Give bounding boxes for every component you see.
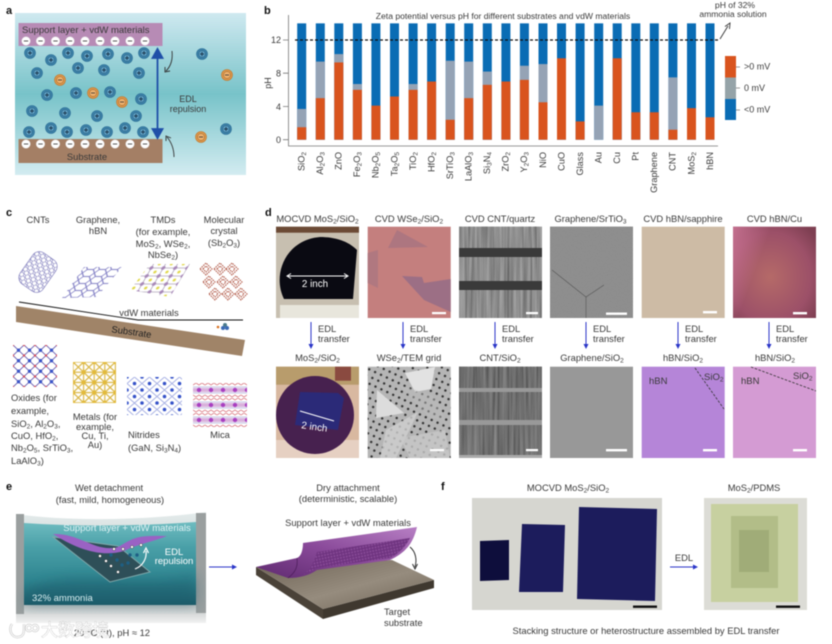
x axis category labels (296, 152, 715, 193)
arrow: EDL transfer: EDL (685, 323, 703, 334)
x axis category labels: TiO (408, 156, 418, 170)
oxides label: LaAlO (11, 455, 37, 466)
metals label (73, 411, 117, 450)
x axis category labels: N (482, 156, 492, 162)
heading TMDs: (for example, (136, 226, 190, 237)
arrow: EDL transfer (492, 322, 534, 349)
EDL repulsion text: repulsion (170, 104, 206, 114)
oxides label: 2 (23, 448, 27, 454)
x axis category labels: MoS (686, 156, 696, 175)
nitrides label: ) (178, 442, 181, 453)
photo: hBN on Cu (733, 227, 816, 318)
photo: MoS2 on PDMS (704, 498, 807, 610)
wedge substrate (16, 306, 245, 356)
arrow: EDL transfer: EDL (502, 323, 520, 334)
icon: carbon nanotube (16, 248, 60, 296)
ions between layers (98, 544, 142, 574)
arrow: EDL transfer: transfer (776, 333, 808, 344)
panel b label: b (264, 5, 271, 17)
arrow: EDL transfer: EDL (318, 323, 336, 334)
heading MOCVD: /SiO (587, 482, 606, 493)
bar NiO (538, 23, 548, 140)
heading molecular crystal: 2 (222, 242, 226, 250)
heading TMDs: MoS (136, 238, 155, 249)
heading MOCVD: 2 (606, 488, 610, 494)
bar hBN (706, 23, 714, 140)
label target substrate: Target (384, 606, 410, 617)
panel c: vdW materials and substrates (6, 207, 247, 468)
ammonia tank (16, 512, 206, 623)
heading TMDs: 2 (184, 244, 188, 250)
heading dry attachment: (deterministic, scalable) (299, 493, 397, 504)
arrow: EDL transfer (400, 322, 442, 349)
x axis category labels: ZrO (500, 156, 510, 171)
oxides label: Nb (11, 442, 23, 453)
heading molecular crystal: Molecular (204, 214, 244, 225)
solution background (15, 13, 246, 175)
heading wet detachment (56, 482, 164, 505)
x axis category labels: 3 (356, 152, 364, 156)
x axis category labels: 2 (691, 152, 698, 156)
bar Y2O3 (520, 23, 529, 140)
y axis ticks (271, 35, 281, 145)
arrow: curved top (165, 51, 172, 72)
oxides label: O (47, 418, 54, 429)
purple film peeling (256, 527, 417, 578)
x axis category labels: SrTiO (445, 156, 455, 179)
heading: /SiO (318, 352, 336, 363)
x axis category labels: 2 (375, 162, 382, 166)
photo: hBN on SiO2: SiO (793, 371, 809, 382)
oxides label: , (56, 430, 58, 441)
photo: hBN on SiO2 (733, 367, 816, 458)
x axis category labels: 2 (301, 152, 308, 156)
heading: 2 (314, 358, 318, 364)
label EDL repulsion (155, 547, 193, 567)
x axis category labels: Y (519, 166, 529, 173)
heading: 2 (418, 218, 422, 226)
x axis category labels: NiO (538, 152, 548, 168)
bar CuO (557, 23, 566, 140)
x axis category labels: 2 (412, 152, 420, 156)
substrate: Substrate (67, 151, 107, 162)
arrow: attachment curved (410, 547, 418, 569)
panel f: wafer-scale stacking (441, 481, 807, 636)
heading molecular crystal: O (226, 237, 233, 248)
negative surface charges (22, 37, 149, 148)
EDL repulsion text (170, 94, 206, 114)
x axis category labels: 3 (450, 152, 456, 156)
heading: CVD CNT/quartz (465, 213, 535, 224)
metals label: Au) (88, 439, 102, 450)
bar SrTiO3 (446, 23, 455, 140)
photo: MOCVD wafer: 2 inch (302, 279, 328, 290)
icon: mica lattice (193, 383, 247, 427)
x axis category labels: LaAlO (464, 156, 474, 181)
photo: CNT arrays on SiO2 (459, 367, 542, 458)
watermark (10, 621, 109, 640)
heading PDMS: /PDMS (751, 482, 780, 493)
photo: hBN on sapphire (642, 227, 725, 318)
arrow: EDL transfer: transfer (685, 333, 717, 344)
x axis category labels: 2 (394, 162, 401, 166)
oxides label: O (27, 442, 34, 453)
x axis category labels: 3 (524, 152, 530, 156)
nitrides label: 4 (174, 448, 178, 454)
x axis category labels: SiO (296, 156, 306, 171)
EDL repulsion text: EDL (179, 94, 197, 104)
y axis title: pH (263, 77, 273, 89)
heading molecular crystal: ) (237, 237, 240, 248)
oxides label: Oxides (for (11, 392, 57, 403)
arrow: EDL: EDL (675, 552, 693, 563)
panel d label: d (265, 207, 272, 219)
x axis category labels: O (370, 156, 380, 163)
legend (725, 56, 770, 120)
x axis category labels: HfO (426, 156, 436, 172)
x axis category labels: ZnO (334, 152, 344, 170)
icon: nitride lattice (127, 377, 182, 415)
heading wet detachment: (fast, mild, homogeneous) (56, 494, 164, 505)
heading: Graphene/SrTiO (554, 213, 623, 224)
column 6: hBN on Cu (733, 213, 816, 458)
heading TMDs: NbSe (148, 249, 171, 260)
heading: CVD hBN/sapphire (643, 213, 723, 224)
bar Au (594, 23, 603, 140)
x axis category labels: Nb (370, 166, 380, 178)
photo: graphene on SiO2 (550, 367, 633, 458)
photo: hBN on SiO2: 2 (809, 376, 813, 382)
heading MOCVD: MOCVD MoS (527, 482, 584, 493)
arrow: EDL transfer: EDL (593, 323, 611, 334)
column 3: CNT (459, 213, 542, 458)
oxides label: 3 (37, 460, 41, 468)
x axis category labels: 2 (505, 152, 512, 156)
heading TMDs: 2 (155, 244, 159, 250)
x axis category labels: Fe (352, 166, 362, 177)
y axis ticks: 12 (271, 35, 281, 45)
substrate (18, 139, 162, 163)
arrow: EDL transfer: transfer (593, 333, 625, 344)
heading: 2 (336, 358, 340, 364)
bar Fe2O3 (353, 23, 362, 140)
icon: molecular crystal (200, 263, 247, 300)
heading: 2 (355, 218, 359, 226)
oxides label: , Al (30, 418, 43, 429)
bar ZrO2 (501, 23, 510, 140)
x axis category labels: Ta (390, 166, 400, 176)
heading: 2 (699, 358, 703, 364)
x axis category labels: hBN (705, 152, 715, 170)
nitrides label (128, 429, 181, 454)
heading: MOCVD MoS (276, 213, 333, 224)
panel a label: a (6, 5, 13, 17)
heading: 3 (623, 218, 627, 226)
x axis category labels: 3 (468, 152, 475, 156)
column 2: WSe2 (368, 213, 451, 458)
oxides label: 2 (27, 424, 31, 430)
positive ions (24, 48, 231, 137)
oxides label: , (58, 418, 60, 429)
x axis category labels: O (519, 156, 529, 163)
vdW materials line (19, 302, 243, 320)
heading: CVD hBN/Cu (747, 213, 802, 224)
heading: Graphene/SiO (560, 352, 620, 363)
heading TMDs: ) (175, 249, 178, 260)
label support layer: Support layer + vdW materials (63, 523, 191, 534)
nitrides label: Nitrides (128, 429, 160, 440)
callout: pH of 32% ammonia solution: pH of 32% (715, 0, 755, 10)
heading dry attachment (299, 482, 397, 504)
panel f label: f (441, 481, 445, 493)
oxides label: SiO (11, 418, 27, 429)
x axis category labels: O (352, 156, 362, 163)
label conditions: 20 °C (rt), pH ≈ 12 (74, 627, 150, 638)
x axis category labels: O (315, 156, 325, 163)
legend: <0 mV (744, 104, 770, 114)
label support layer dry: Support layer + vdW materials (285, 517, 411, 528)
panel a: EDL repulsion schematic (6, 5, 246, 175)
nitrides label: (GaN, Si (128, 442, 164, 453)
oxides label: , SrTiO (38, 442, 67, 453)
arrow: EDL transfer: transfer (502, 333, 534, 344)
nitrides label: 3 (164, 448, 168, 454)
x axis category labels: CNT (668, 152, 678, 171)
x axis category labels: Glass (575, 152, 585, 176)
heading TMDs: , (188, 238, 190, 249)
x axis category labels: O (390, 156, 400, 163)
oxides label (11, 392, 73, 468)
arrow: EDL transfer (584, 322, 625, 349)
bar SiO2 (297, 23, 306, 140)
label 32% ammonia: 32% ammonia (32, 593, 93, 604)
x axis category labels: Cu (612, 152, 622, 164)
heading: MoS (295, 352, 314, 363)
heading: hBN/SiO (663, 352, 699, 363)
heading graphene: Graphene, (76, 214, 120, 225)
column 4: graphene (550, 213, 633, 458)
nitrides label: N (168, 442, 174, 453)
x axis category labels: Pt (630, 152, 640, 161)
x axis category labels: 2 (524, 162, 530, 166)
mica label: Mica (210, 429, 231, 440)
heading graphene: hBN (89, 225, 107, 236)
legend: >0 mV (744, 62, 770, 72)
legend: 0 mV (744, 83, 765, 93)
label target substrate (384, 606, 423, 628)
oxides label: example, (11, 405, 49, 416)
bar Nb2O5 (371, 23, 380, 140)
oxides label: 3 (67, 448, 71, 454)
heading MOCVD: 2 (584, 488, 588, 494)
panel e: wet detachment and dry attachment (6, 481, 434, 640)
icon: graphene lattice (62, 267, 122, 298)
axes (283, 15, 718, 146)
heading molecular crystal: (Sb (208, 237, 222, 248)
arrow: EDL transfer: transfer (318, 333, 350, 344)
icon: small molecules (217, 323, 229, 330)
column 5: hBN on sapphire (642, 213, 725, 458)
y axis ticks: 8 (276, 68, 281, 78)
caption: Stacking structure or heterostructure assembled by EDL transfer (513, 625, 779, 636)
photo: TEM grid (368, 367, 451, 458)
dashed line at pH 12 (295, 39, 719, 41)
bar Si3N4 (483, 23, 492, 140)
arrow: EDL transfer (308, 322, 350, 349)
column 1: MoS2 (276, 213, 359, 458)
heading: CNT/SiO (479, 352, 517, 363)
photo: graphene on SrTiO3 (550, 227, 633, 318)
x axis category labels: Al (315, 166, 325, 175)
heading CNTs: CNTs (27, 214, 50, 225)
photo: hBN on SiO2: 2 (720, 376, 724, 384)
metals label: Metals (for (73, 411, 117, 422)
photo: WSe2 triangles (368, 227, 451, 318)
heading molecular crystal: crystal (210, 225, 238, 236)
heading: /SiO (337, 213, 355, 224)
bar Al2O3 (316, 23, 325, 140)
heading TMDs (136, 214, 190, 262)
vdW materials line: vdW materials (119, 307, 179, 318)
callout: pH of 32% ammonia solution (699, 0, 767, 39)
arrow: curved bottom (166, 136, 174, 157)
heading TMDs: , WSe (159, 238, 184, 249)
heading: CVD WSe (375, 213, 418, 224)
heading: 2 (439, 218, 443, 226)
heading: /TEM grid (401, 352, 441, 363)
heading PDMS: MoS (728, 482, 747, 493)
x axis category labels: Au (594, 152, 604, 163)
oxides label: , (70, 442, 73, 453)
photo: transferred wafer in hand (276, 367, 359, 458)
x axis category labels: 3 (486, 162, 494, 166)
support layer: Support layer + vdW materials (22, 25, 150, 36)
photo: CNT arrays on quartz (459, 227, 542, 318)
heading TMDs: 2 (171, 254, 175, 262)
photo: transferred wafer in hand: 2 inch (301, 420, 328, 435)
arrow: EDL transfer: EDL (410, 323, 428, 334)
heading: 2 (517, 358, 521, 364)
heading: WSe (377, 352, 397, 363)
photo: three MoS2 wafers (472, 498, 662, 610)
heading: 2 (620, 358, 624, 364)
heading: 2 (333, 218, 337, 226)
dark substrate slab (53, 537, 150, 582)
bar MoS2 (687, 23, 696, 140)
photo: MOCVD wafer (276, 227, 359, 318)
label EDL repulsion: repulsion (155, 556, 193, 567)
bar TiO2 (409, 23, 418, 140)
heading: /SiO (421, 213, 439, 224)
oxides label: CuO, HfO (11, 430, 52, 441)
arrow: EDL transfer: EDL (776, 323, 794, 334)
bar Glass (576, 23, 585, 140)
heading: 2 (791, 358, 795, 364)
y axis ticks: 0 (276, 135, 281, 145)
heading PDMS: 2 (747, 488, 751, 494)
wedge substrate: Substrate (111, 323, 152, 340)
oxides label: ) (41, 455, 44, 466)
bar Cu (613, 23, 622, 140)
label target substrate: substrate (384, 617, 423, 628)
arrow: wet to dry (209, 564, 237, 570)
label EDL repulsion: EDL (165, 547, 183, 558)
arrow: white curved EDL repulsion (135, 548, 148, 569)
icon: metal lattice (73, 362, 116, 403)
x axis category labels: 5 (394, 152, 401, 156)
x axis category labels: Graphene (649, 152, 659, 193)
y axis ticks: 4 (276, 102, 281, 112)
heading: 2 (397, 358, 401, 364)
bar ZnO (334, 23, 343, 140)
x axis category labels: CuO (556, 152, 566, 171)
watermark: 大数跨境 (41, 621, 109, 640)
x axis category labels: 2 (431, 152, 438, 156)
x axis category labels: 5 (375, 152, 382, 156)
bar Ta2O5 (390, 23, 399, 140)
photo: hBN on SiO2: hBN (741, 376, 760, 387)
heading molecular crystal: 3 (233, 242, 237, 250)
bars (297, 23, 714, 140)
heading dry attachment: Dry attachment (316, 482, 380, 493)
metals label: example, (76, 421, 114, 432)
x axis category labels: 3 (320, 152, 326, 156)
x axis category labels: 2 (356, 162, 364, 166)
target substrate block (256, 560, 434, 619)
bar LaAlO3 (464, 23, 473, 140)
water (24, 522, 196, 605)
arrow: EDL (670, 552, 698, 570)
arrow: EDL transfer (766, 322, 808, 349)
support layer (18, 23, 162, 46)
photo: hBN on SiO2: SiO (704, 372, 720, 383)
bar CNT (668, 23, 677, 140)
x axis category labels: 2 (320, 162, 326, 166)
heading graphene (76, 214, 120, 236)
heading molecular crystal (204, 214, 244, 250)
negative ions (55, 70, 232, 142)
panel c label: c (6, 207, 12, 219)
panel b: zeta potential chart (263, 0, 770, 193)
photo: hBN on SiO2: hBN (649, 376, 668, 387)
icon: TMD lattice (130, 264, 190, 297)
x axis category labels: 4 (486, 152, 494, 156)
panel e label: e (6, 481, 12, 493)
bar Pt (631, 23, 640, 140)
oxides label: 5 (34, 448, 38, 454)
chart title: Zeta potential versus pH for different substrates and vdW materials (376, 11, 630, 21)
oxides label: 3 (54, 424, 58, 430)
arrow: EDL double-headed (152, 49, 162, 138)
oxides label: 2 (43, 424, 47, 430)
arrow: EDL transfer: transfer (410, 333, 442, 344)
oxides label: 2 (52, 436, 56, 442)
arrow: EDL transfer (676, 322, 717, 349)
x axis category labels: Si (482, 166, 492, 174)
bar Graphene (650, 23, 659, 140)
bar HfO2 (427, 23, 436, 140)
purple support layer sheet (53, 534, 167, 553)
heading: hBN/SiO (755, 352, 791, 363)
metals label: Cu, Ti, (81, 430, 109, 441)
panel d: EDL transfer of materials (265, 207, 816, 458)
heading wet detachment: Wet detachment (75, 482, 143, 493)
photo: hBN on SiO2 (642, 367, 725, 458)
heading TMDs: TMDs (150, 214, 176, 225)
icon: oxide lattice (13, 345, 57, 387)
callout: pH of 32% ammonia solution: ammonia solution (699, 9, 767, 19)
